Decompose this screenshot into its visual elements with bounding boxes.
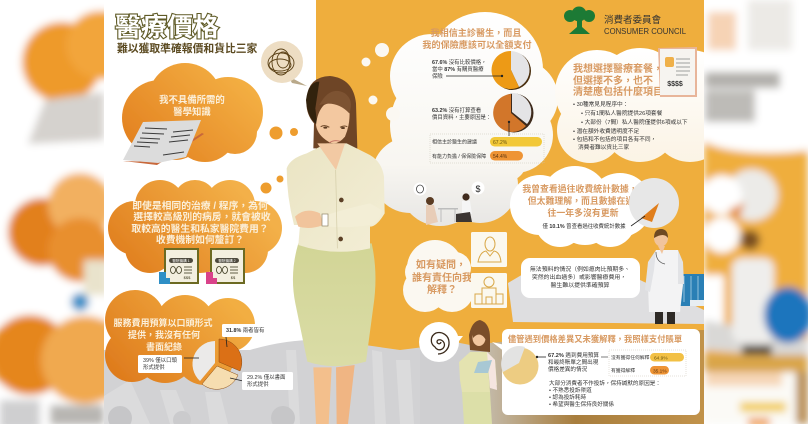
cloud: statistics white: [510, 166, 652, 247]
panel: who explains heading: 誰有責任向我: [412, 271, 472, 284]
logo: consumer council: 消費者委員會: [604, 14, 662, 26]
bar chart: explanation: 有獲得解釋: [611, 367, 635, 374]
callout: unforeseeable situations: [521, 258, 640, 298]
icon: document hospital one: [159, 248, 199, 284]
text: 63.2 stat: 價目資料，主要原因是：: [432, 113, 491, 121]
text: verbal quote: 服務費用預算以口頭形式: [113, 317, 213, 328]
bar chart: explanation: 沒有獲得任何解釋: [611, 354, 650, 361]
label: both: [222, 324, 264, 337]
callout: unforeseeable situations: 醫生難以提供準確預算: [551, 281, 610, 289]
label: written only: [242, 372, 293, 390]
text: verbal quote: 書面紀錄: [146, 341, 182, 352]
text: 67.2 stat: 67.2% 遇到費用預算: [548, 353, 599, 359]
panel: medical knowledge cloud: [122, 63, 263, 165]
illustration: consultation scene: $: [475, 184, 481, 194]
cloud: top right white: [556, 48, 704, 163]
title: 醫療價格: [115, 14, 219, 42]
text: pricing question: 即使是相同的治療 / 程序，為何: [132, 199, 268, 212]
label: verbal only: [138, 355, 182, 373]
cloud: top centre white: [372, 12, 558, 226]
icon: scribble thought bubble: [261, 41, 307, 86]
text: package bullets: • 只有1間私人醫院提供26項套餐: [581, 109, 663, 117]
panel: statistics heading: 我曾查看過往收費統計數據，: [522, 183, 638, 194]
bar chart: reasons: 54.4%: [493, 154, 508, 160]
heading: 儘管遇到價格差異又未獲解釋，我照樣支付賬單: [508, 334, 682, 344]
bar chart: reasons: 有能力負擔 / 保保險保障: [432, 153, 486, 160]
icon: hospital card: [471, 273, 507, 308]
background: brown shading behind bottom panel: [470, 322, 704, 424]
orange thought bubbles: [260, 126, 298, 194]
label: verbal only: 39% 僅以口頭: [143, 356, 177, 364]
subtitle: 難以獲取準確報價和貨比三家: [117, 41, 258, 55]
text: pricing question: 選擇較高級別的病房，就會被收: [133, 210, 271, 223]
background: orange right area: [316, 0, 704, 350]
text: 67.2 stat: [536, 351, 599, 373]
text: pricing question: 取較高的醫生和私家醫院費用？: [131, 222, 269, 235]
bar chart: reasons: [430, 134, 544, 163]
table surface: [508, 270, 704, 324]
pie chart: 67.2: [501, 346, 538, 384]
background: orange band above bottom panel: [458, 324, 704, 345]
text: reasons for silence: • 認為投訴耗時: [549, 393, 586, 401]
icon: doctor card: [471, 232, 507, 267]
bar chart: reasons: 相信主診醫生的建議: [432, 138, 477, 146]
text: package bullets: • 潛在額外收費透明度不足: [573, 127, 639, 135]
white thought bubbles: [362, 43, 393, 120]
panel: who explains heading: 如有疑問，: [416, 258, 466, 271]
background: grey floor: [104, 340, 504, 424]
text: package bullets: • 30種常見見程序中：: [573, 100, 628, 108]
bar chart: explanation: 64.9%: [654, 356, 668, 362]
text: 67.6 stat: 當中 87% 有購買醫療: [432, 67, 484, 73]
label: written only: 形式提供: [247, 380, 269, 388]
pie chart: quote format: [184, 337, 243, 389]
text: reasons for silence: • 不熟悉投訴渠道: [549, 386, 592, 394]
blurred right strip: [700, 0, 808, 424]
panel: paid anyway: [492, 329, 700, 415]
background: white left area: [104, 6, 141, 350]
label: written only: 29.2% 僅以書面: [247, 373, 286, 381]
panel: pricing mechanism cloud: [108, 180, 282, 284]
label: both: 31.8% 兩者皆有: [226, 326, 265, 334]
icon: document hospital two: 醫院機構 2: [218, 258, 236, 263]
panel: verbal quote cloud: [105, 290, 293, 390]
text: pricing question: 收費機制如何釐訂？: [156, 233, 244, 246]
icon: open book: [123, 120, 204, 165]
figure: main woman: [287, 76, 385, 424]
icon: document hospital one: $$$: [184, 275, 191, 280]
icon: document hospital two: [206, 248, 245, 284]
figure: second woman: [459, 320, 497, 424]
label: verbal only: 形式提供: [143, 363, 165, 371]
text: 10.1 stat: 僅 10.1% 曾查看過往收費統計數據: [543, 222, 626, 230]
text: 67.2 stat: 和最終賬單之間出現: [548, 358, 599, 366]
icon: price document: [658, 47, 697, 97]
text: 67.6 stat: 保險: [432, 72, 443, 80]
text: verbal quote: 提供，我沒有任何: [128, 329, 200, 340]
illustration: blue equipment: [677, 274, 704, 306]
callout: unforeseeable situations: 突然的出血過多）或影響醫療費用，: [532, 273, 626, 281]
panel: packages heading: 但選擇不多，也不: [573, 74, 653, 87]
text: reasons for silence: • 希望與醫生保持良好關係: [549, 400, 614, 408]
icon: spiral thought bubble: [419, 322, 463, 362]
icon: document hospital two: $$: [231, 275, 236, 280]
text: package bullets: • 包括和不包括的項目各有不同，: [573, 135, 656, 143]
text: 63.2 stat: 63.2% 沒有打算查看: [432, 108, 481, 114]
text: reasons for silence: 大部分消費者不作投訴，保持緘默的原因是：: [549, 379, 661, 387]
text: package bullets: • 大部份（7間）私人醫院僅提供6項或以下: [581, 118, 688, 126]
icon: price document: $$$$: [667, 81, 683, 88]
pie chart: 67.6: [446, 51, 531, 90]
panel: packages heading: 我想選擇醫療套餐，: [573, 62, 663, 75]
illustration: consultation scene: [414, 182, 484, 225]
bar chart: reasons: 67.2%: [493, 140, 508, 146]
panel: who explains heading: 解釋？: [427, 283, 457, 296]
bar chart: explanation: [601, 350, 686, 376]
icon: document hospital one: 醫院機構 1: [172, 258, 190, 263]
panel: packages heading: 清楚應包括什麼項目: [573, 85, 663, 98]
cloud: who explains white: [403, 240, 474, 312]
text: 67.6 stat: 67.6% 沒有比較價格，: [432, 60, 487, 66]
panel: statistics heading: 但太難理解，而且數據在過: [528, 195, 634, 206]
main panel artwork: [104, 0, 735, 424]
callout: unforeseeable situations: 無法預料的情況（例如瘜肉比預期多、: [530, 265, 630, 273]
pie chart: 63.2: [493, 93, 534, 136]
panel: trust doctor heading: 我相信主診醫生，而且: [431, 27, 521, 38]
pie chart: 10.1: [629, 178, 679, 228]
text: no medical knowledge: 我不具備所需的: [159, 94, 225, 105]
icon: tree: [564, 6, 595, 34]
panel: statistics heading: 往一年多沒有更新: [548, 207, 619, 218]
figure: doctor: [645, 229, 684, 324]
blurred left strip: [0, 0, 134, 424]
text: 67.2 stat: 價格差異的情況: [548, 365, 588, 373]
bar chart: explanation: 35.1%: [653, 368, 667, 374]
logo: consumer council: CONSUMER COUNCIL: [604, 27, 687, 36]
panel: trust doctor heading: 我的保險應該可以全額支付: [422, 39, 532, 50]
text: package bullets: 消費者難以貨比三家: [578, 143, 629, 151]
text: no medical knowledge: 醫學知識: [173, 106, 211, 117]
logo: consumer council: [564, 6, 687, 36]
